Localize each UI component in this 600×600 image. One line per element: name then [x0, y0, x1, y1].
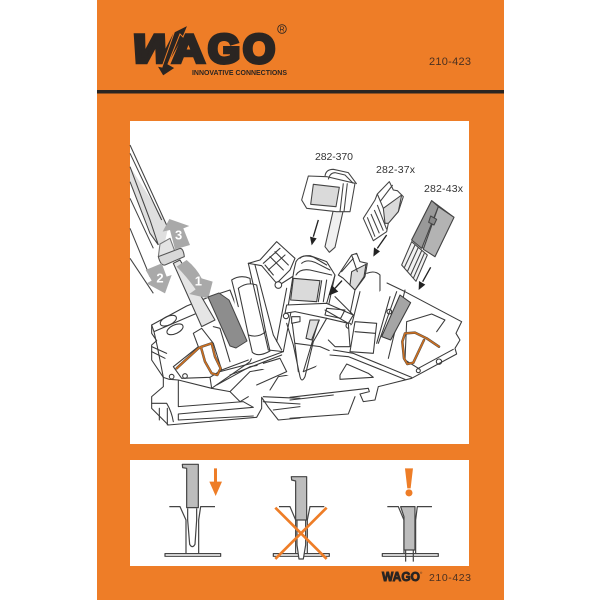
central plug: [288, 256, 335, 307]
footer logo: WAGO: [382, 570, 420, 584]
exclamation mark: [405, 468, 413, 496]
white silhouette: [232, 242, 393, 382]
grey wedge: left: [208, 293, 247, 348]
arrow 1: 1: [195, 274, 202, 289]
footer logo: ®: [420, 571, 423, 575]
terminal block: left: [152, 290, 300, 425]
central spine: [306, 320, 319, 340]
inserted comb: [338, 253, 367, 290]
label: 282-43x: 282-43x: [424, 183, 464, 195]
test comb: [248, 242, 295, 283]
spring: left: [177, 343, 221, 375]
black arrow into plug: [335, 281, 342, 288]
282-370 arrow: [313, 220, 318, 237]
logo: WAGO: INNOVATIVE CONNECTIONS: [192, 70, 287, 77]
step: correct insertion: [165, 464, 222, 556]
foot: [152, 377, 300, 425]
label: 282-37x: 282-37x: [376, 164, 416, 176]
terminal block: centre: [220, 242, 393, 385]
282-37x arrow: [377, 235, 387, 248]
panel: insertion steps: [130, 460, 469, 566]
282-43x arrow: [423, 267, 431, 282]
component: 282-43x: [402, 242, 427, 281]
right ferrule: [352, 272, 380, 352]
logo: WAGO: W: [127, 26, 185, 71]
label: 282-370: 282-370: [315, 151, 353, 163]
step: fully seated: [382, 468, 438, 562]
component: 282-37x: [363, 182, 403, 241]
arrow down: [209, 468, 222, 496]
centre bridge: [285, 303, 353, 323]
part number top: 210-423: [429, 56, 471, 68]
header divider: [97, 90, 504, 94]
panel: main diagram: [130, 121, 469, 444]
logo: WAGO: [127, 25, 287, 77]
logo: WAGO: R: [279, 26, 285, 34]
arrow 3: 3: [175, 227, 182, 242]
arrow 2: [146, 263, 172, 293]
spring: right: [402, 333, 439, 364]
orange label background: [97, 0, 504, 600]
terminal block: right: [290, 283, 462, 418]
arrow 3: [163, 219, 190, 249]
arrow 1: [177, 260, 213, 298]
component: 282-370: [302, 169, 454, 290]
step: wrong insertion: [273, 477, 329, 559]
arrow 2: 2: [156, 270, 164, 285]
part number footer: 210-423: [429, 572, 471, 584]
logo: WAGO: O: [243, 28, 275, 72]
centre left ferrule: [232, 277, 251, 307]
logo: WAGO: G: [208, 28, 240, 72]
cross: [275, 508, 327, 559]
screwdriver: [130, 145, 215, 327]
logo: WAGO: A: [172, 28, 205, 72]
